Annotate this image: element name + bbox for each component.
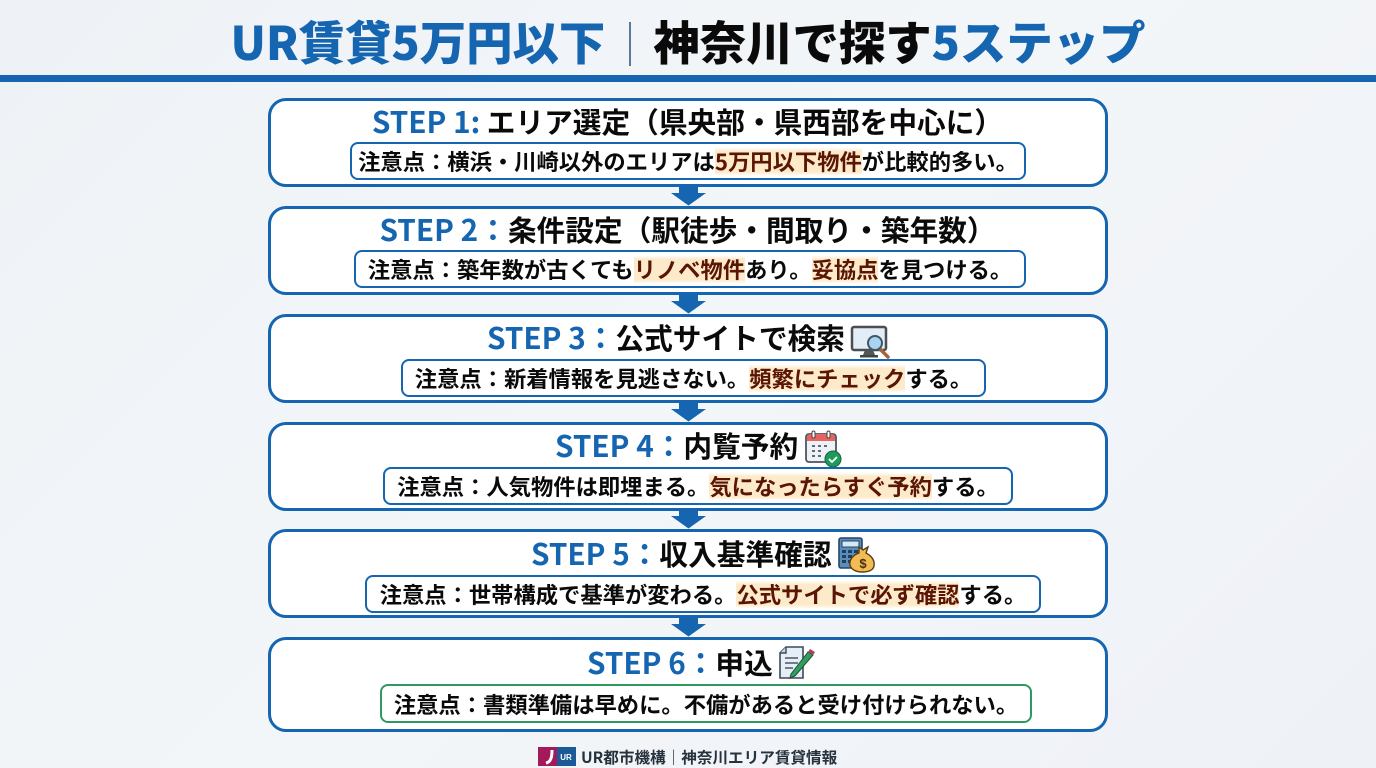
step 4 heading: STEP 4：内覧予約 — [555, 423, 798, 466]
icon: UR logo: UR — [560, 753, 572, 762]
icon: calendar with check — [805, 430, 842, 467]
title: UR賃貸5万円以下 神奈川で探す5ステップ — [230, 7, 1146, 74]
icon: UR logo — [538, 747, 576, 766]
step 4 note: 注意点：人気物件は即埋まる。気になったらすぐ予約する。 — [397, 470, 999, 502]
icon: calculator and money bag — [838, 537, 875, 573]
icon: document with pen — [779, 646, 815, 679]
panel: step 1 — [268, 98, 1108, 187]
step 6 note: 注意点：書類準備は早めに。不備があると受け付けられない。 — [394, 688, 1018, 720]
icon: monitor with magnifier — [850, 326, 890, 359]
step 5 heading: STEP 5：収入基準確認 — [531, 531, 832, 574]
footer text: UR都市機構｜神奈川エリア賃貸情報 — [581, 746, 837, 768]
step 3 note: 注意点：新着情報を見逃さない。頻繁にチェックする。 — [415, 362, 972, 394]
arrow 5 — [671, 618, 706, 636]
panel: step 2 — [268, 206, 1108, 295]
arrow 1 — [671, 187, 706, 206]
footer — [538, 746, 837, 768]
panel: step 4 — [268, 422, 1108, 511]
panel: step 3 — [268, 314, 1108, 403]
arrow 4 — [671, 511, 706, 528]
step 5 note: 注意点：世帯構成で基準が変わる。公式サイトで必ず確認する。 — [380, 578, 1026, 610]
step 1 note: 注意点：横浜・川崎以外のエリアは5万円以下物件が比較的多い。 — [358, 145, 1018, 177]
panel: step 6 — [268, 637, 1108, 732]
step 2 heading: STEP 2：条件設定（駅徒歩・間取り・築年数） — [379, 207, 996, 250]
step 1 heading: STEP 1: エリア選定（県央部・県西部を中心に） — [372, 99, 1003, 142]
panel: step 5 — [268, 529, 1108, 618]
step 3 heading: STEP 3：公式サイトで検索 — [487, 315, 845, 358]
icon: calculator and money bag: $ — [859, 556, 867, 571]
arrow 3 — [671, 403, 706, 422]
step 2 note: 注意点：築年数が古くてもリノベ物件あり。妥協点を見つける。 — [368, 253, 1012, 285]
header rule — [0, 75, 1376, 82]
arrow 2 — [671, 295, 706, 314]
step 6 heading: STEP 6：申込 — [587, 640, 773, 683]
